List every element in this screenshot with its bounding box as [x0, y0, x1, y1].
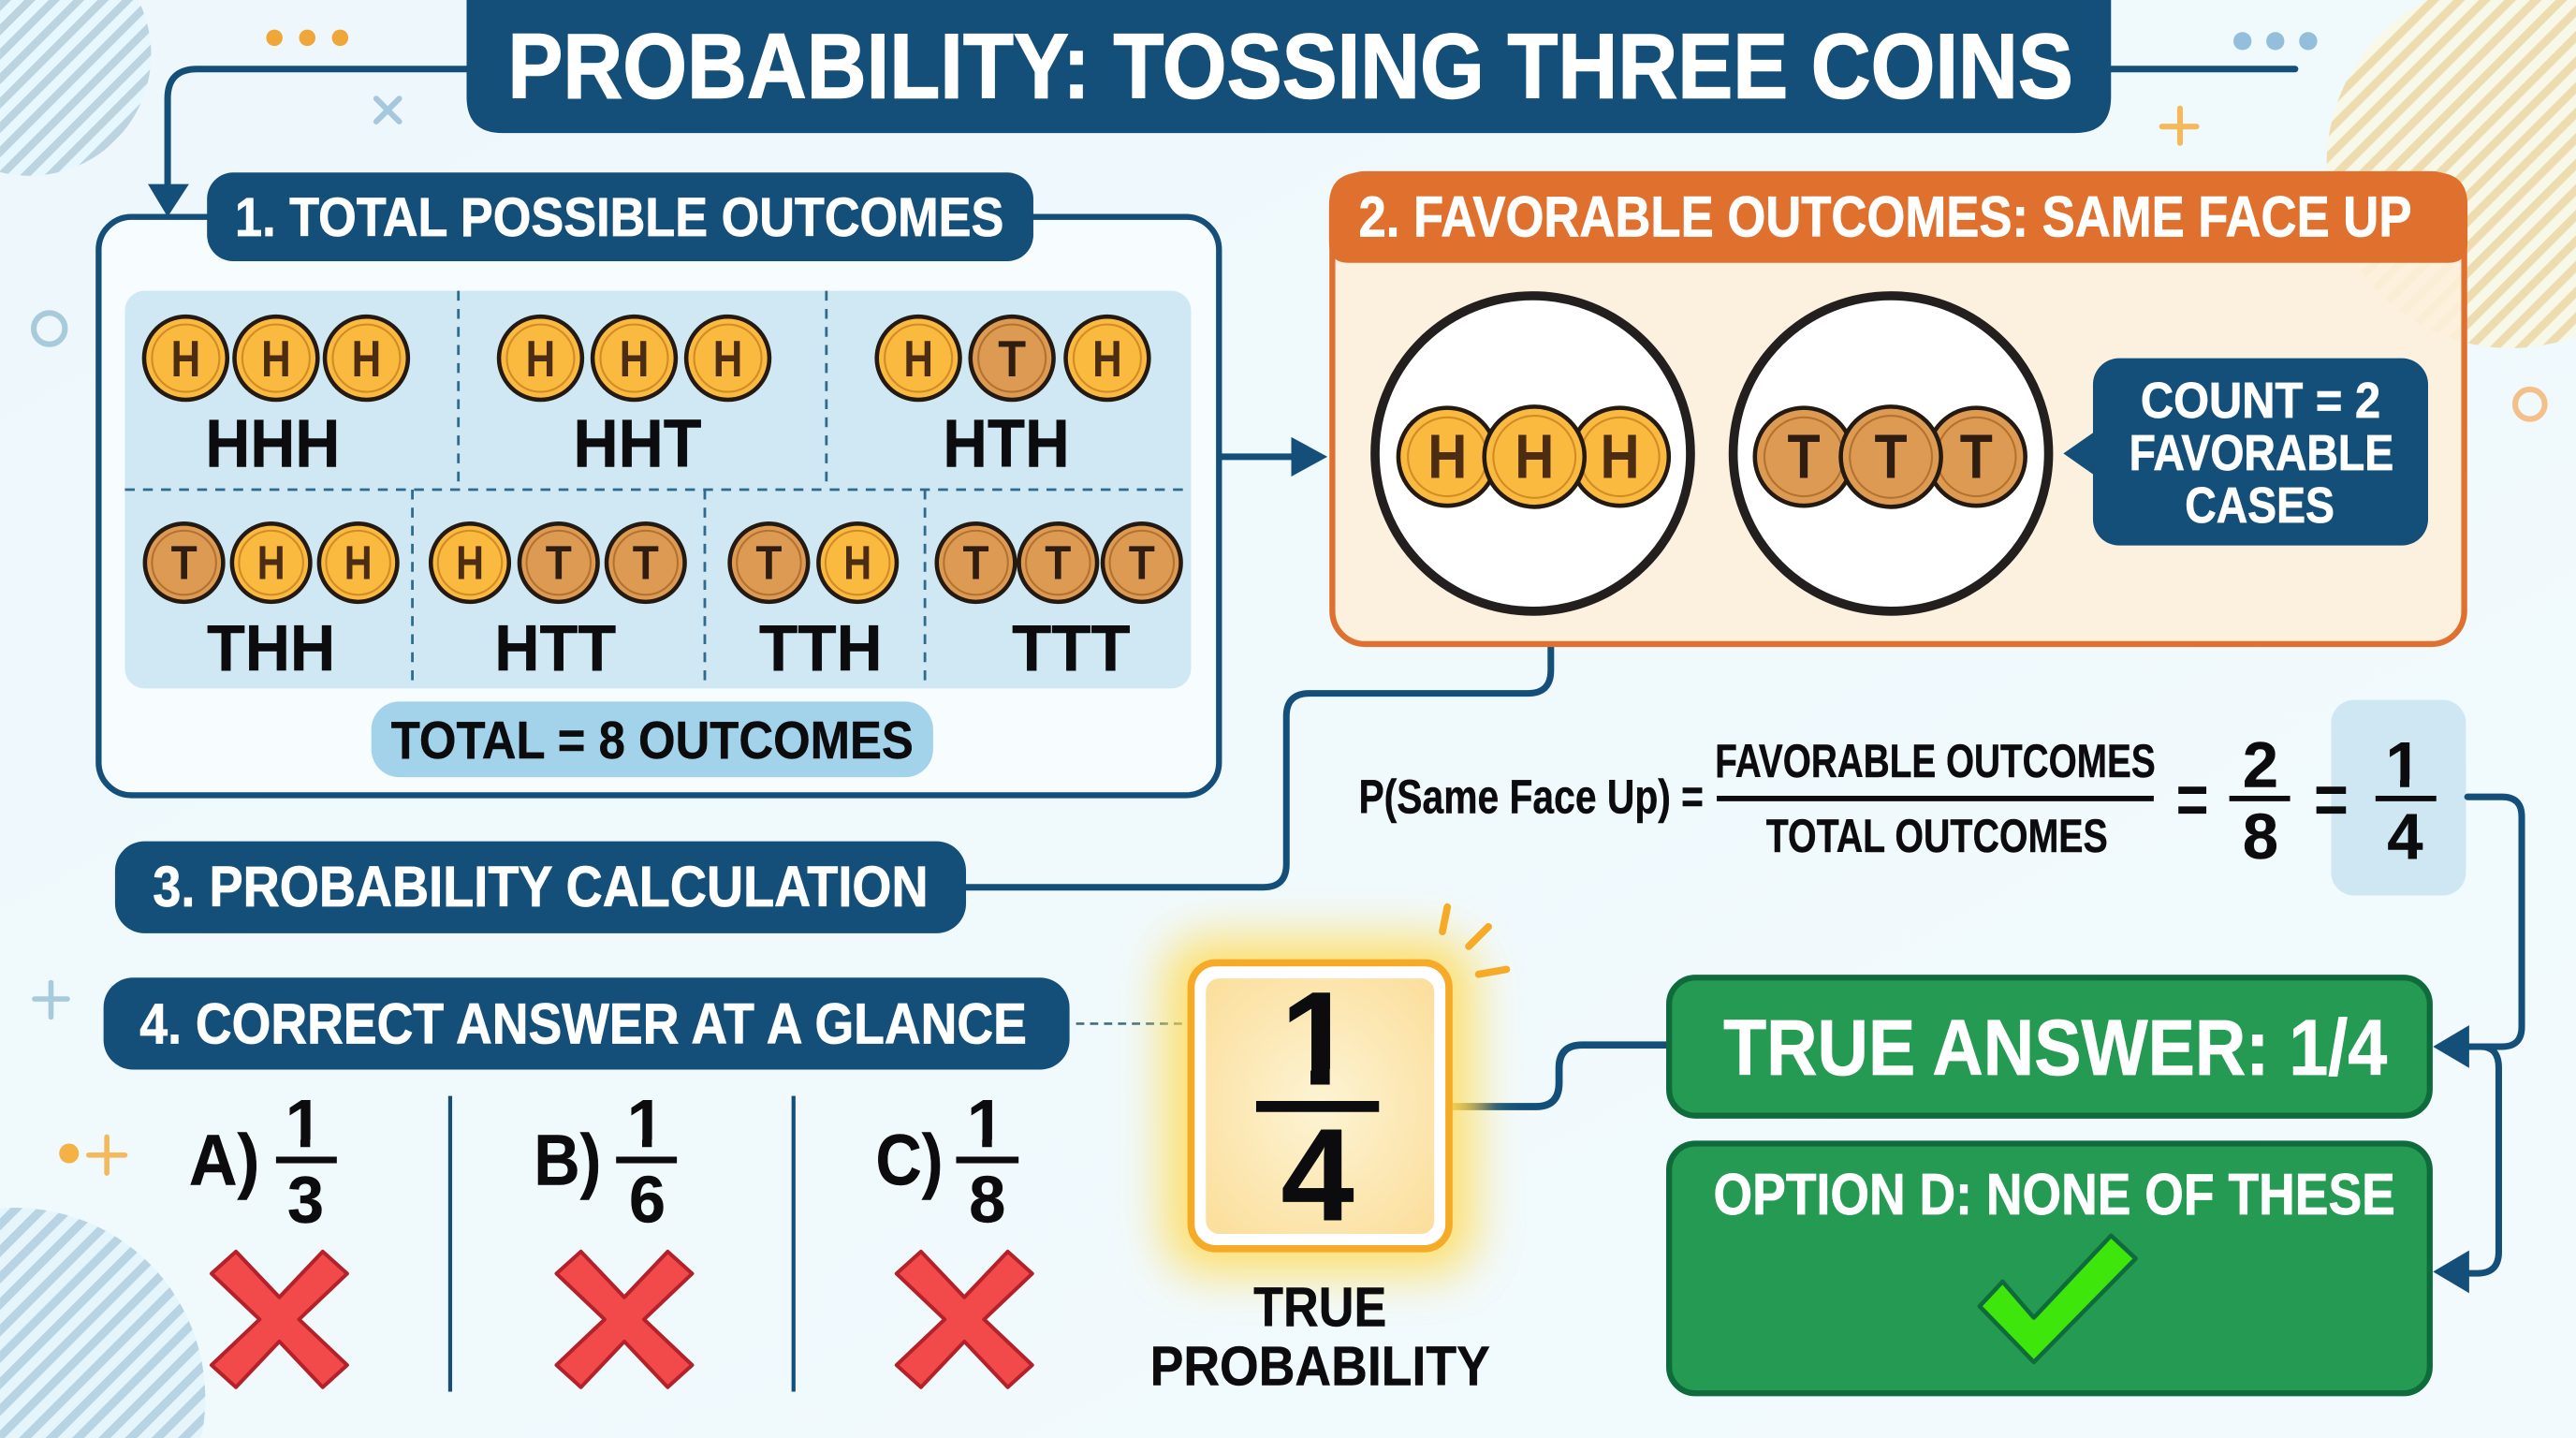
- coins HHH: H: [261, 330, 291, 388]
- option C: 8: [969, 1163, 1005, 1237]
- panel: total possible outcomes: [98, 217, 1219, 795]
- callout: count: FAVORABLE: [2130, 426, 2393, 481]
- coins HHT: [499, 316, 769, 400]
- decoration: blue plus: [35, 983, 67, 1017]
- label HTT: HTT: [494, 611, 616, 684]
- option B: B): [534, 1120, 601, 1200]
- arrow: title to panel 1: [148, 69, 470, 217]
- total pill: TOTAL = 8 OUTCOMES: [391, 711, 914, 770]
- coins THH: T: [171, 536, 198, 590]
- divider A B: [449, 1096, 451, 1392]
- heading: section 1: 1. TOTAL POSSIBLE OUTCOMES: [235, 187, 1003, 248]
- caption: true probability: PROBABILITY: [1150, 1334, 1490, 1397]
- option C: C): [875, 1120, 943, 1200]
- coins HTT: H: [456, 536, 484, 590]
- coins HHH: [144, 316, 408, 400]
- coins HHH: H: [352, 330, 381, 388]
- coins HHT: H: [526, 330, 555, 388]
- dashed link to highlighted answer: [1076, 1022, 1186, 1024]
- heading: section 3: [115, 842, 966, 933]
- circle with HHH coins: H: [1600, 423, 1640, 492]
- option B: 6: [629, 1163, 666, 1237]
- coins THH: [145, 523, 397, 602]
- coins TTT: T: [1129, 536, 1155, 590]
- arrow: panel 1 to panel 2: [1221, 437, 1327, 477]
- callout: count: COUNT = 2: [2141, 374, 2380, 429]
- true answer box: [1669, 977, 2430, 1116]
- circle with HHH coins: H: [1515, 423, 1554, 492]
- option B: [534, 1087, 692, 1387]
- coins TH: H: [843, 536, 871, 590]
- coins HTT: [431, 523, 685, 602]
- decoration: blue cross: [376, 98, 400, 122]
- formula: TOTAL OUTCOMES: [1766, 810, 2108, 862]
- connector: title right stub: [2111, 67, 2295, 71]
- icon: green check: [1980, 1236, 2136, 1362]
- icon: sparkle lines: [1442, 907, 1506, 975]
- formula: P(Same Face Up) =: [1358, 770, 1704, 824]
- decoration: striped circle top right: [2327, 0, 2576, 348]
- label HHH: HHH: [205, 406, 340, 481]
- circle with HHH coins: H: [1427, 423, 1467, 492]
- coins HTH: [877, 316, 1149, 400]
- callout: count: [2063, 359, 2428, 546]
- highlighted answer: one quarter: 4: [1281, 1101, 1354, 1248]
- option C: [875, 1087, 1032, 1387]
- heading: section 3: 3. PROBABILITY CALCULATION: [153, 855, 929, 919]
- coins THH: H: [344, 536, 373, 590]
- decoration: blue dots: [2233, 32, 2318, 51]
- connector: highlighted answer to true answer: [1453, 1045, 1669, 1107]
- grid dashed dividers: [124, 291, 1191, 688]
- connector: panel 2 to calculation: [966, 644, 1551, 888]
- label THH: THH: [207, 611, 335, 684]
- coins HTH: H: [1092, 330, 1122, 388]
- label HHT: HHT: [574, 406, 701, 481]
- heading: section 4: 4. CORRECT ANSWER AT A GLANCE: [139, 991, 1027, 1056]
- decoration: orange ring: [2515, 389, 2545, 419]
- coins HHT: H: [713, 330, 742, 388]
- option D box: [1669, 1143, 2430, 1393]
- arrow: formula to true answer: [2433, 797, 2522, 1068]
- panel: favorable outcomes: [1329, 172, 2467, 644]
- icon: red cross: [557, 1252, 692, 1387]
- circle with HHH coins: [1375, 296, 1690, 611]
- coins HTT: T: [546, 536, 572, 590]
- coins HTT: T: [633, 536, 659, 590]
- heading: section 1: [207, 172, 1033, 261]
- coins TTT: T: [1045, 536, 1071, 590]
- coins TTT: T: [963, 536, 989, 590]
- title banner: PROBABILITY: TOSSING THREE COINS: [507, 14, 2073, 117]
- decoration: orange plus top right: [2162, 109, 2197, 143]
- option B: 1: [627, 1087, 665, 1162]
- true answer box: TRUE ANSWER: 1/4: [1723, 1004, 2387, 1092]
- caption: true probability: [1150, 1275, 1490, 1397]
- option D box: OPTION D: NONE OF THESE: [1714, 1163, 2395, 1227]
- decoration: orange dot and plus: [59, 1137, 124, 1173]
- callout: count: CASES: [2185, 478, 2334, 534]
- decoration: orange dots: [266, 30, 348, 46]
- coins TTT: [937, 523, 1181, 602]
- heading: section 2: 2. FAVORABLE OUTCOMES: SAME FACE UP: [1358, 185, 2411, 250]
- heading: section 2: [1329, 172, 2467, 263]
- highlighted answer: one quarter: 1: [1281, 964, 1354, 1113]
- formula: 1: [2386, 729, 2422, 801]
- label TTT: TTT: [1012, 611, 1131, 684]
- formula: 4: [2387, 800, 2422, 873]
- circle with TTT coins: T: [1960, 423, 1993, 492]
- formula: [1358, 700, 2466, 895]
- decoration: striped circle top left: [0, 0, 151, 176]
- circle with TTT coins: [1734, 296, 2049, 611]
- icon: red cross: [897, 1252, 1032, 1387]
- coins HTH: H: [903, 330, 933, 388]
- label HTH: HTH: [943, 406, 1070, 481]
- option A: 1: [285, 1087, 323, 1162]
- heading: section 4: [104, 977, 1070, 1070]
- coins HHT: H: [620, 330, 649, 388]
- label TTH: TTH: [759, 611, 883, 684]
- formula: FAVORABLE OUTCOMES: [1715, 735, 2156, 787]
- coins HTH: T: [998, 330, 1026, 388]
- decoration: striped circle bottom left: [0, 1208, 205, 1438]
- option C: 1: [967, 1087, 1004, 1162]
- formula: 8: [2243, 800, 2278, 873]
- option A: [189, 1087, 347, 1387]
- highlighted answer: one quarter: [1164, 936, 1475, 1275]
- icon: red cross: [212, 1252, 347, 1387]
- decoration: blue ring: [34, 313, 65, 345]
- formula: 2: [2243, 729, 2278, 801]
- divider B C: [793, 1096, 795, 1392]
- coins HHH: H: [171, 330, 200, 388]
- coins TH: [730, 523, 897, 602]
- coins TH: T: [755, 536, 782, 590]
- outcomes grid background: [124, 291, 1191, 688]
- option A: 3: [287, 1163, 324, 1237]
- option A: A): [189, 1120, 259, 1200]
- circle with TTT coins: T: [1875, 423, 1908, 492]
- caption: true probability: TRUE: [1253, 1275, 1386, 1338]
- arrow: true answer to option D: [2433, 1047, 2498, 1293]
- circle with TTT coins: T: [1788, 423, 1821, 492]
- coins THH: H: [257, 536, 285, 590]
